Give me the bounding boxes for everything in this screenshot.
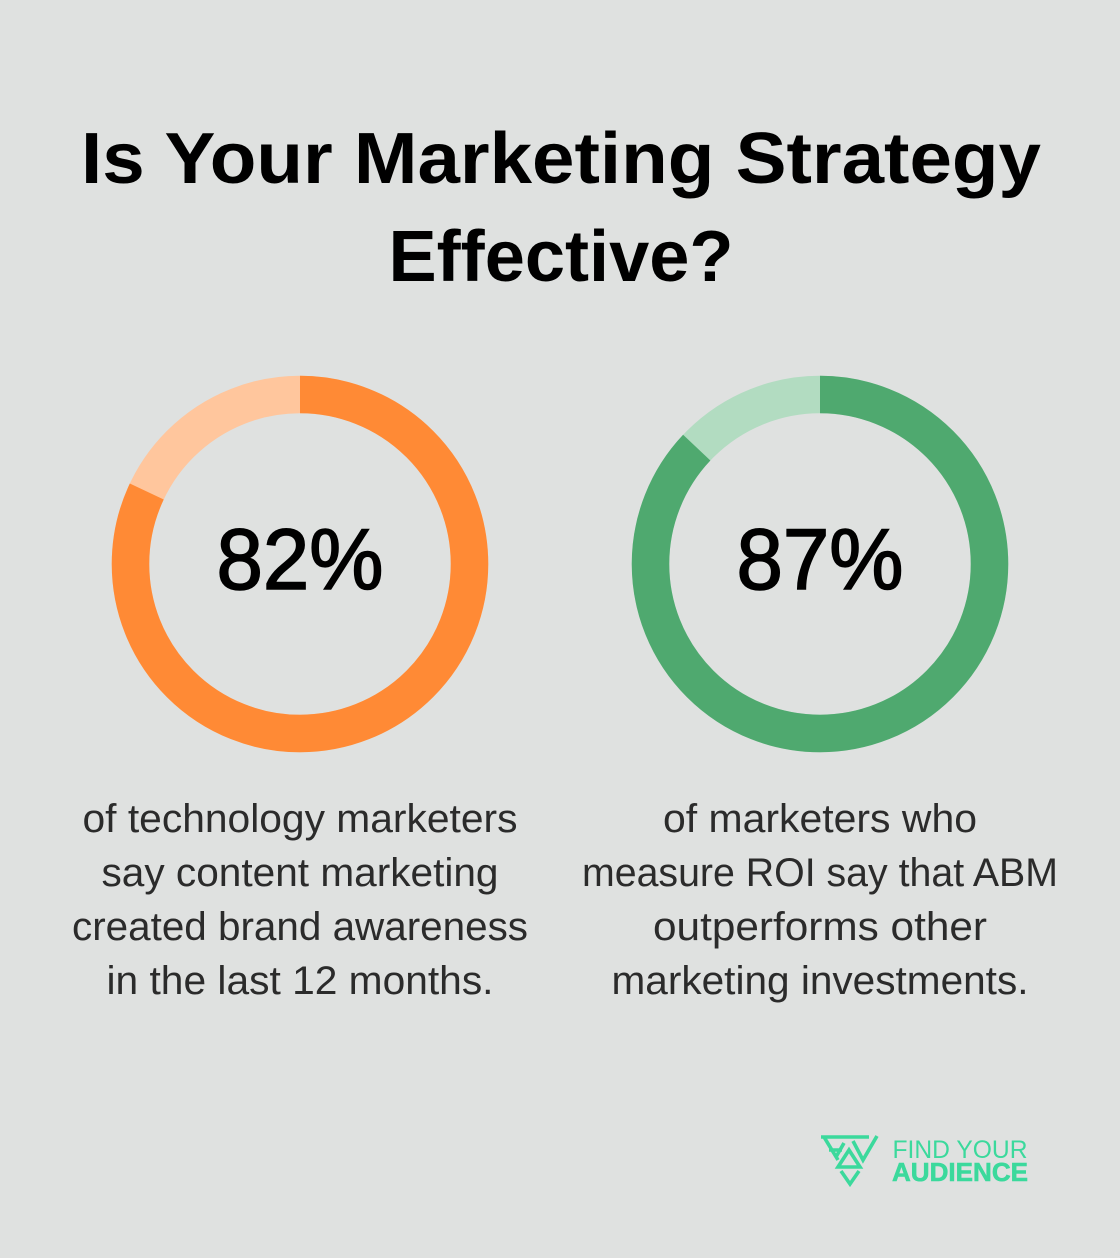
title	[81, 119, 1041, 297]
description: marketers who measure ROI	[582, 797, 1058, 1003]
title: Effective?	[388, 217, 734, 297]
description: technology marketers	[72, 797, 528, 1003]
description: technology marketers: created brand awareness	[72, 905, 528, 949]
logo: Find Your Audience	[821, 1136, 1028, 1187]
description: marketers who measure ROI: outperforms other	[653, 905, 987, 949]
donut chart: 82%	[130, 394, 470, 734]
description: technology marketers: in the last 12 months.	[106, 959, 494, 1003]
description: marketers who measure ROI: measure ROI say that ABM	[582, 851, 1058, 895]
wordmark: AUDIENCE	[892, 1157, 1028, 1187]
wordmark: FIND YOUR	[892, 1136, 1028, 1164]
icon: triangles mark	[821, 1136, 877, 1184]
panel: 87% statistic	[582, 394, 1058, 1003]
panel: 82% statistic	[72, 394, 528, 1003]
title: Is Your Marketing Strategy	[81, 119, 1041, 199]
description: marketers who measure ROI: marketing investments.	[612, 959, 1028, 1003]
donut chart: 87%	[650, 394, 990, 734]
description: technology marketers: of technology marketers	[82, 797, 518, 841]
wordmark	[892, 1136, 1028, 1187]
value: 82%: 82%	[216, 512, 384, 608]
description: technology marketers: say content marketing	[102, 851, 499, 895]
description: marketers who measure ROI: of marketers who	[663, 797, 977, 841]
value: 87%: 87%	[736, 512, 904, 608]
